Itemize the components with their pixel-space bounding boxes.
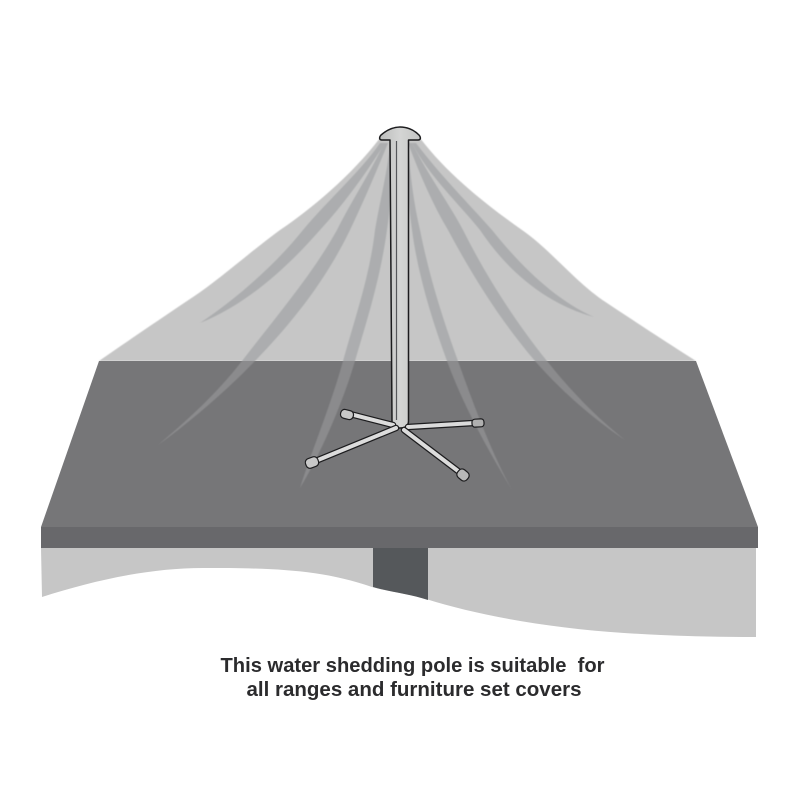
cover front band: [41, 527, 758, 548]
cover top: dark flat surface: [41, 361, 758, 527]
pole inner highlight line: [396, 141, 398, 420]
caption: This water shedding pole is suitable for: [220, 655, 605, 677]
caption: all ranges and furniture set covers: [246, 679, 582, 701]
leg: front right: [404, 430, 471, 483]
illustration: water shedding pole under a furniture cover: [41, 126, 758, 700]
pole shaft and domed cap: [380, 127, 420, 428]
caption: [220, 655, 605, 701]
leg: back left: [340, 409, 393, 425]
cover skirt: lower front with wavy cut: [41, 548, 756, 637]
table support post: [373, 548, 428, 600]
cover folds on canopy: [158, 143, 625, 490]
cover canopy: light upper section: [99, 138, 696, 361]
leg: back right: [408, 419, 484, 427]
pole: [380, 127, 420, 428]
pole base: four legs: [304, 409, 484, 483]
leg: front left: [304, 428, 396, 469]
cover folds visible on dark surface: [164, 361, 619, 486]
